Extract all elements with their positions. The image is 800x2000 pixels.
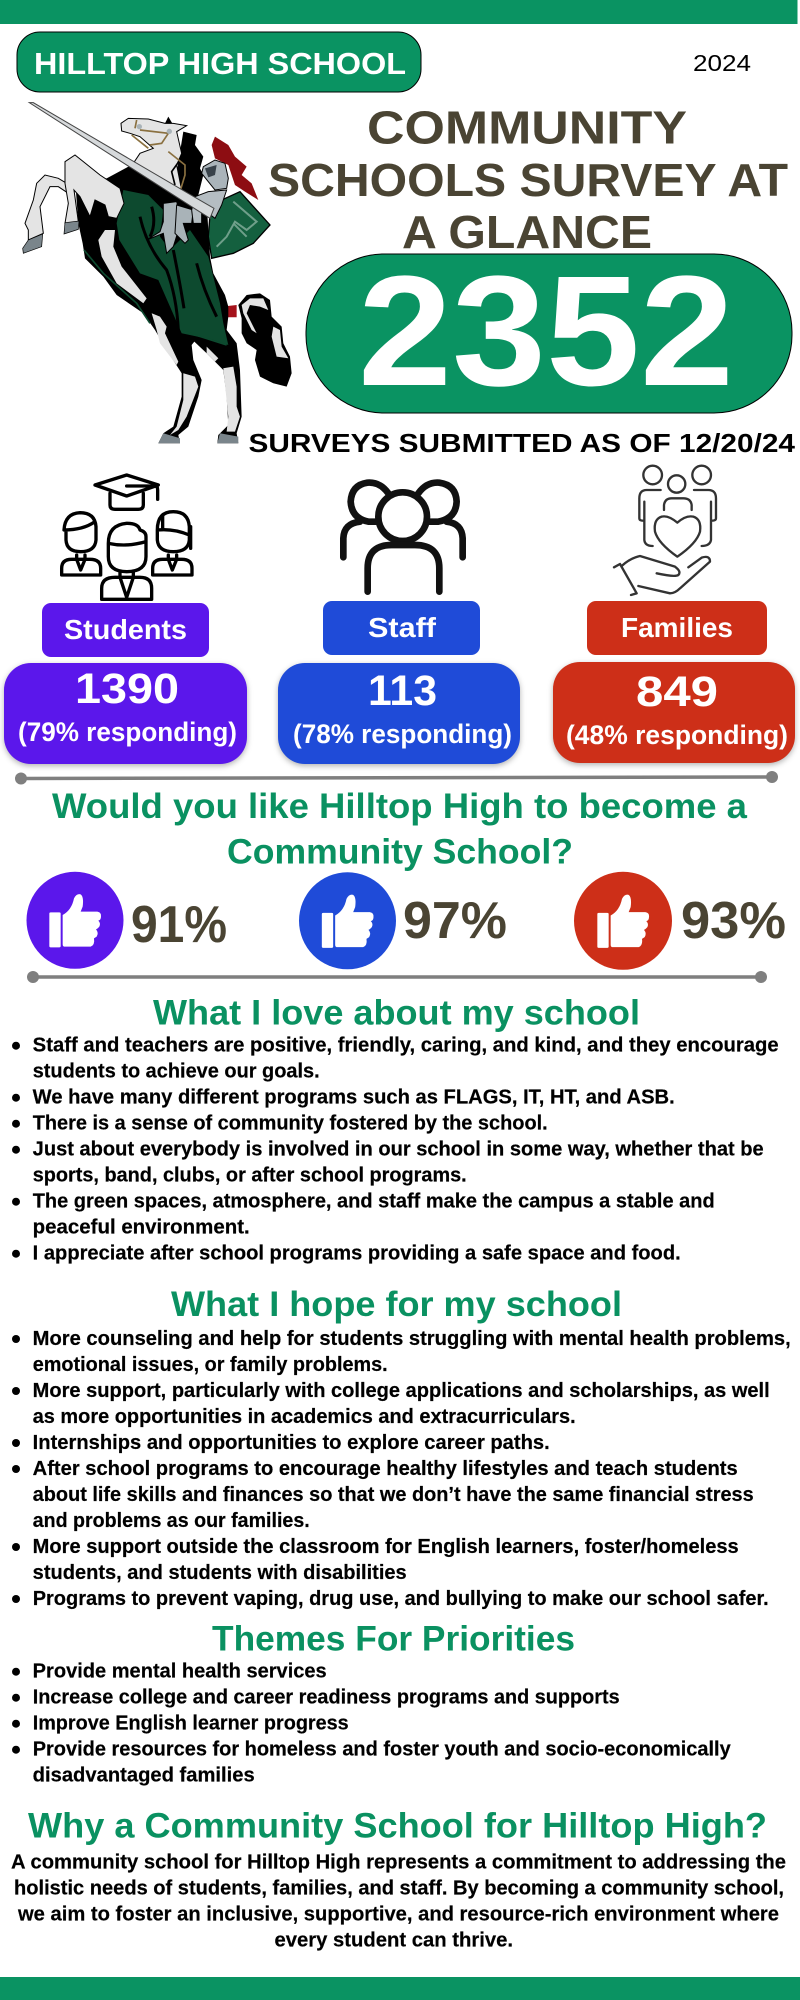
stat: families thumbs up 93%: 93% [681,892,786,950]
list: what I love: Staff and teachers are positive, friendly, caring, and kind, and they encourage [33,1035,779,1057]
school name badge: HILLTOP HIGH SCHOOL [34,46,406,81]
title: A GLANCE [402,206,652,258]
icon: students [62,475,192,599]
list: what I love: sports, band, clubs, or after school programs. [33,1165,467,1187]
stat: staff thumbs up 97%: 97% [403,892,507,950]
list: themes [12,1661,732,1787]
list: what I love: students to achieve our goals. [33,1061,320,1083]
list: themes: Improve English learner progress [33,1713,349,1735]
question heading [52,787,748,872]
icon: knight on rearing horse mascot [23,103,292,443]
panel: staff [278,601,520,764]
list: what I hope: More counseling and help for students struggling with mental health problems, [33,1328,791,1350]
total surveys pill: 2352 [358,244,734,419]
panel: families [553,601,795,763]
list: what I love: There is a sense of community fostered by the school. [33,1113,548,1135]
list: what I love: Just about everybody is involved in our school in some way, whether that be [33,1139,764,1161]
list: what I hope: and problems as our families. [33,1510,310,1532]
stat: families thumbs up 93% [574,872,786,970]
icon: families [614,466,716,595]
panel: students: (79% responding) [18,717,237,747]
question heading: Community School? [227,832,573,872]
title: COMMUNITY [367,102,687,154]
panel: students [4,603,247,764]
panel: staff: Staff [368,612,437,643]
stat: students thumbs up 91% [26,872,227,969]
list: what I love: The green spaces, atmosphere, and staff make the campus a stable and [33,1191,715,1213]
list: what I hope: After school programs to encourage healthy lifestyles and teach students [33,1458,738,1480]
school name badge [17,32,421,92]
list: themes: disadvantaged families [33,1765,255,1787]
panel: families: Families [621,612,733,643]
list: what I hope: More support outside the classroom for English learners, foster/homeless [33,1536,739,1558]
list: what I hope: emotional issues, or family problems. [33,1354,388,1376]
surveys submitted caption: SURVEYS SUBMITTED AS OF 12/20/24 [248,428,796,458]
list: themes: Provide mental health services [33,1661,327,1683]
paragraph: why a community school: every student can thrive. [274,1929,513,1951]
panel: students: 1390 [75,665,179,713]
bottom green bar [0,1977,800,2000]
panel: students: Students [64,614,187,645]
year: 2024 [693,50,751,76]
paragraph: why a community school: A community school for Hilltop High represents a commitment to addressing the [11,1851,786,1873]
list: what I hope: students, and students with disabilities [33,1562,407,1584]
heading: what I love: What I love about my school [153,993,640,1032]
list: what I love: We have many different programs such as FLAGS, IT, HT, and ASB. [33,1087,675,1109]
list: what I hope: as more opportunities in academics and extracurriculars. [33,1406,576,1428]
title [268,102,788,258]
list: what I hope: Programs to prevent vaping, drug use, and bullying to make our school safer. [33,1588,769,1610]
top green bar [0,0,798,24]
list: themes: Provide resources for homeless and foster youth and socio-economically [33,1739,732,1761]
list: themes: Increase college and career readiness programs and supports [33,1687,620,1709]
heading: themes for priorities: Themes For Priorities [212,1620,575,1659]
icon: staff [343,483,463,592]
paragraph: why a community school: we aim to foster an inclusive, supportive, and resource-rich environment where [17,1903,779,1925]
paragraph: why a community school [11,1851,786,1951]
list: what I love: I appreciate after school programs providing a safe space and food. [33,1243,681,1265]
stat: staff thumbs up 97% [299,872,507,969]
list: what I hope: More support, particularly with college applications and scholarships, as well [33,1380,770,1402]
list: what I hope: Internships and opportunities to explore career paths. [33,1432,550,1454]
heading: what I hope: What I hope for my school [171,1285,622,1324]
heading: why a community school: Why a Community School for Hilltop High? [28,1807,767,1846]
stat: students thumbs up 91%: 91% [131,896,227,954]
list: what I love: peaceful environment. [33,1217,250,1239]
panel: staff: (78% responding) [293,719,512,749]
list: what I hope: about life skills and finances so that we don’t have the same financial stress [33,1484,754,1506]
list: what I hope [12,1328,791,1610]
panel: families: 849 [636,668,718,716]
question heading: Would you like Hilltop High to become a [52,787,748,826]
paragraph: why a community school: holistic needs of students, families, and staff. By becoming a community school, [14,1877,784,1899]
title: SCHOOLS SURVEY AT [268,154,788,206]
panel: families: (48% responding) [566,720,788,750]
panel: staff: 113 [368,667,437,715]
list: what I love [12,1035,779,1265]
